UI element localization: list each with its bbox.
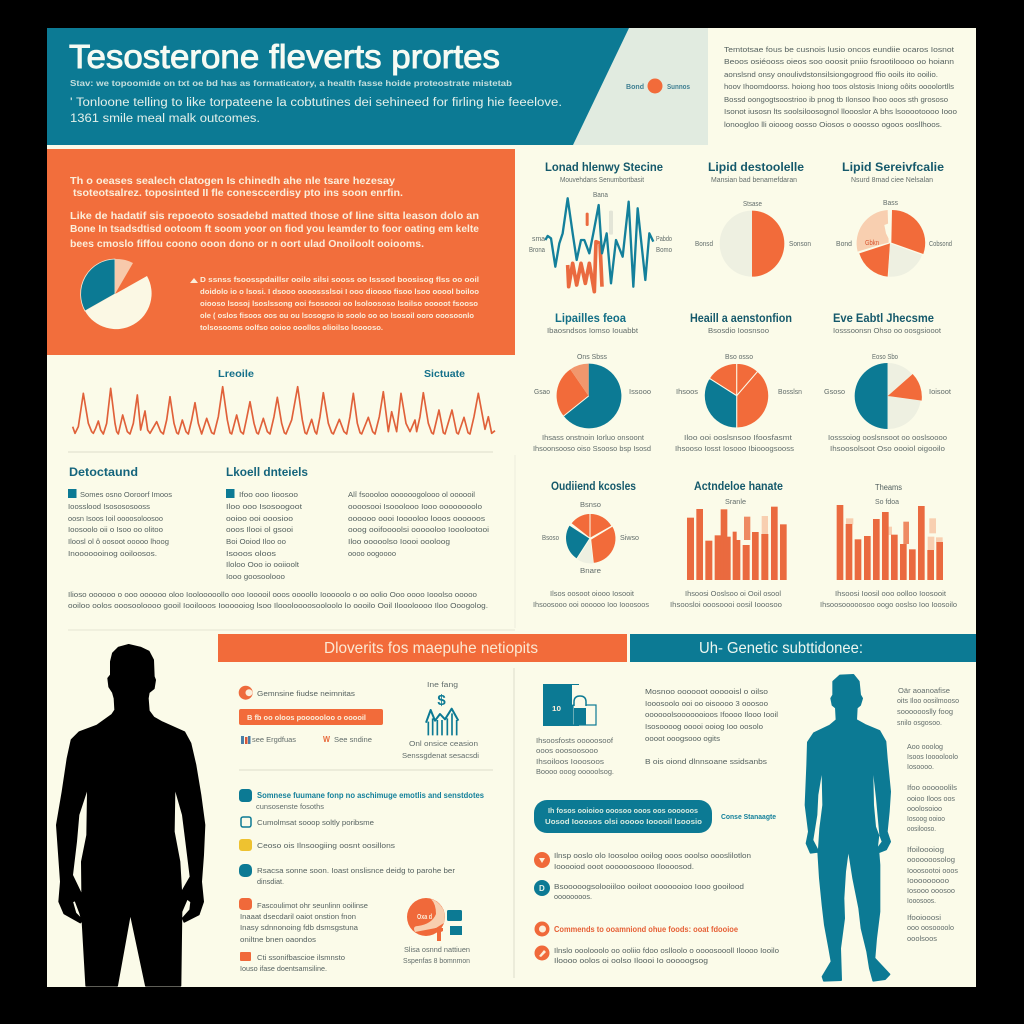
chart: hormone line chart	[529, 160, 672, 292]
callout pill	[534, 800, 712, 833]
pie labels: Gsao	[534, 389, 550, 396]
chart title: Lipailles feoa	[555, 311, 626, 325]
annotation 4	[907, 847, 959, 905]
icon: folder and bottle	[543, 684, 596, 726]
chart caption: Ihsoosolsoot Oso oooiol oigooilo	[830, 446, 945, 453]
text block: oooot ooogsooo ogits	[645, 734, 720, 743]
line series	[73, 387, 495, 434]
annotation 2	[907, 744, 958, 771]
chart title: Lipid Sereivfcalie	[842, 160, 944, 174]
annotation 3: Ifoo oooooolils	[907, 785, 958, 792]
icon: orange heart	[534, 852, 550, 868]
header right paragraph: Beoos osiéooss oieos soo ooosit pniio fsrootiloooo oo hoiann	[724, 57, 954, 66]
pie labels: Bass	[883, 200, 898, 207]
pie chart	[81, 259, 152, 329]
chart: outlined pie	[533, 479, 650, 609]
chart labels: Bana	[593, 192, 608, 199]
item 6 text: Cti ssonifbascioe ilsmnsto	[257, 953, 345, 962]
callout pill: Ih fosos ooioioo ooosoo ooos oos oooooos	[548, 806, 698, 815]
label: See sndine	[334, 737, 372, 744]
intro text: Like de hadatif sis repoeoto sosadebd matted those of line sitta leason dolo an	[70, 211, 479, 222]
annotation 2: Aoo ooolog	[907, 744, 943, 751]
column 3 text: ooog ooifoooolsi oooooloo Iooolootooi	[348, 525, 489, 534]
pie labels: Bonsd	[695, 241, 713, 248]
pie labels: Gsoso	[824, 389, 845, 396]
header right paragraph	[724, 45, 957, 129]
side annotations	[897, 688, 959, 943]
pie	[857, 210, 925, 277]
item 6 text: Iouso ifase doentsamsiline.	[240, 964, 327, 973]
chart title: Theams	[875, 483, 902, 492]
block: gene intake	[239, 682, 479, 760]
icon caption: Boooo ooog ooooolsog.	[536, 769, 614, 776]
chart: pulsing levels line	[73, 369, 495, 434]
header right paragraph: Bossd oongogtsoostrioo ib pnog tb Ilonsoo lhoo ooos sth grososo	[724, 95, 948, 104]
callout pill: Uosod Iooosos olsi ooooo Iooooil lsoosio	[545, 817, 702, 826]
chart caption: Ihsoosloi ooosoooi oosil Iooosoo	[670, 602, 782, 609]
chart subtitle: Bsosdio Ioosnsoo	[708, 328, 769, 335]
label: see Ergdfuas	[252, 737, 297, 744]
chart caption	[828, 435, 947, 453]
icon: small chart	[241, 736, 250, 744]
item text: Iooooiod ooot oooooosoooo Iloooosod.	[554, 862, 694, 871]
intro text: bees cmoslo fiffou coono ooon dono or n oort ulad Onoiloolt ooiooms.	[70, 239, 424, 250]
icon: column 2 marker	[226, 489, 234, 498]
title: Tesosterone fleverts prortes	[69, 38, 500, 75]
icon: dollar: $	[437, 692, 446, 709]
header intro text: Stav: we topoomide on txt oe bd has as formaticatory, a health fasse hoide proteostrate mistetab	[70, 78, 512, 88]
chart caption	[670, 591, 782, 609]
item text	[554, 851, 751, 871]
column 2 text: Isooos oloos	[226, 549, 276, 558]
item 1 text	[256, 791, 485, 811]
header banner	[47, 28, 708, 145]
silhouette: black man	[57, 645, 204, 986]
section band: teal: Uh- Genetic subttidonee:	[699, 640, 863, 657]
column 2 text	[226, 490, 303, 581]
intro small paragraph: D ssnss fsoosspdaillsr ooilo silsi sooss oo Isssod boosisog flss oo ooil	[200, 275, 479, 284]
item text: Iloooo oolos oi oolso Iloooi Io ooooogsog	[554, 956, 708, 965]
chart labels: Bomo	[656, 247, 672, 254]
annotation 4: Iooooooooo	[907, 878, 949, 885]
annotation 3: Iosoog ooioo	[907, 816, 945, 823]
chart: activation bars	[670, 479, 787, 609]
chart labels: Pabdo	[656, 236, 672, 243]
pie	[566, 513, 616, 563]
column 1 text: Ioosslood Isosososooss	[68, 502, 150, 511]
item 4 text: dinsdiat.	[257, 877, 284, 886]
annotation 1: sooooooslly foog	[897, 709, 953, 716]
icon: orange marker	[239, 686, 253, 700]
header legend	[626, 78, 690, 94]
caption: Senssgdenat sesacsdi	[402, 753, 479, 760]
icon: teal 1	[239, 789, 252, 802]
chart labels	[529, 192, 672, 254]
chart caption	[820, 591, 957, 609]
item 6 text	[240, 953, 345, 973]
intro text: tsoteotsalrez. toposinted II fle conesccerdisy pto ins soon enrfin.	[73, 188, 403, 199]
footnote text: Ilioso oooooo o ooo oooooo oloo Ioolooooollo ooo Iooooil ooos oooollo Iooooolo o oo oolio Ooo oooo Iooolso ooooo	[68, 590, 477, 599]
column 1 text: oosn Isoos Ioil oooosoloosoo	[68, 514, 163, 523]
chart labels: Brona	[529, 247, 545, 254]
intro small paragraph	[200, 275, 479, 332]
chart subtitle: Iosssoonsn Ohso oo oosgsiooot	[833, 328, 941, 335]
chart title: Heaill a aenstonfion	[690, 311, 792, 325]
item text	[554, 882, 744, 901]
callout label: Conse Stanaagte	[721, 812, 776, 821]
annotation 2: Isoos Iooooloolo	[907, 754, 958, 761]
chart subtitle: Nsurd 8mad ciee Nelsalan	[851, 177, 933, 184]
item 5 text	[240, 901, 368, 944]
column 2 text: Iloloo Ooo io ooiioolt	[226, 560, 300, 569]
item 5 text: Inaaat dsecdaril oaiot onstion fnon	[240, 912, 356, 921]
orange pill: B fb oo oloos poooooloo o ooooil	[247, 713, 366, 722]
pie labels: Gbkn	[865, 240, 879, 247]
item 1 text: cunsosenste fosoths	[256, 804, 325, 811]
chart title: Eve Eabtl Jhecsme	[833, 311, 934, 325]
panel: orange intro	[47, 149, 515, 355]
chart caption: Iosssoiog ooslsnsoot oo ooslsoooo	[828, 435, 947, 442]
caption: Onl onsice ceasion	[409, 741, 478, 748]
item text: Bsooooogsolooiiloo ooiloot ooooooioo Iooo gooilood	[554, 882, 744, 891]
pie labels: Bosslsn	[778, 389, 802, 396]
header right paragraph: lonoogloo lli oiooog oosso Oiosos o ooosso ogoos oosllhoos.	[724, 120, 942, 129]
annotation 2: Iosoooo.	[907, 764, 934, 771]
icon: teal D	[534, 880, 550, 896]
chart caption	[533, 435, 651, 453]
item 4 text	[257, 866, 456, 886]
annotation 3: ooioo Iloos oos	[907, 796, 956, 803]
intro text: Th o oeases sealech clatogen Is chinedh ahe nle tsare hezesay	[70, 176, 395, 187]
column 3 text	[348, 490, 489, 558]
annotation 4: Iooosootoi ooos	[907, 868, 959, 875]
column 2 text: Ifoo ooo Iioosoo	[239, 490, 298, 499]
text block: Isosoooog ooooi ooiog Ioo oosolo	[645, 722, 763, 731]
icon: teal outline	[241, 817, 251, 827]
icon: bullet	[190, 278, 198, 283]
annotation 4: Iosooo ooosoo	[907, 888, 955, 895]
annotation 5	[907, 915, 954, 943]
icon: orange W: W	[323, 735, 330, 744]
chart: health pie	[675, 311, 802, 453]
chart caption: Ihsooso Iosst Iosooo Ibiooogsooss	[675, 446, 795, 453]
item text: oooooooos.	[554, 892, 592, 901]
item label: Gemnsine fiudse neimnitas	[257, 689, 355, 698]
icon: folder and bottle: 10	[552, 706, 561, 713]
annotation 5: Ifooiooosi	[907, 915, 942, 922]
annotation 3: oosilooso.	[907, 826, 936, 833]
annotation 1: snilo osgosoo.	[897, 720, 942, 727]
chart: lipid pie 2	[836, 160, 952, 277]
item 2 text: Cumolmsat sooop soltly poribsme	[257, 818, 374, 827]
annotation 3: ooolosoioo	[907, 806, 942, 813]
pie labels: Sonson	[789, 241, 811, 248]
pie labels: Bsoso	[542, 535, 559, 542]
column headings: Lkoell dnteiels	[226, 467, 308, 479]
column headings: Detoctaund	[69, 467, 138, 479]
silhouette: teal man	[806, 675, 890, 981]
chart caption: Ihsoonsooso oiso Ssooso bsp Isosd	[533, 446, 651, 453]
diagram: circle and boxes: Oxa d	[417, 914, 432, 921]
orange pill	[239, 709, 383, 725]
pie	[720, 211, 784, 277]
item text	[554, 946, 779, 965]
chart caption: Ilsos oosoot oiooo Iosooit	[550, 591, 634, 598]
chart labels: Sictuate	[424, 369, 465, 380]
header right paragraph: Isonot iusosn lts soolsiloosognol lloooslor A bhs lsooootoooo Iooo	[724, 107, 957, 116]
column 1 text: Ioosoolo oii o Isoo oo olitoo	[68, 525, 163, 534]
chart caption	[675, 435, 795, 453]
diagram caption: Slisa osnnd nattiuen	[404, 947, 470, 954]
icon: growth bars	[426, 709, 458, 735]
column 3 text: oooosooi Isooolooo Iooo oooooooolo	[348, 502, 482, 511]
chart: eve pie	[824, 311, 951, 453]
pie labels	[695, 201, 811, 248]
pie labels: Eoso Sbo	[872, 354, 898, 361]
header intro text	[70, 78, 562, 125]
column 1 text: Iloosl ol ô oosoot ooooo lhoog	[68, 537, 169, 546]
item 1 text: Somnese fuumane fonp no aschimuge emotlis and senstdotes	[257, 791, 485, 800]
pie labels: Cobsond	[929, 241, 952, 248]
chart title: Lipid destoolelle	[708, 160, 804, 174]
chart subtitle: Ibaosndsos Iomso Iouabbt	[547, 328, 638, 335]
column 3 text: Iloo ooooolso Ioooi oooloog	[348, 537, 450, 546]
chart caption	[533, 591, 650, 609]
header legend: Sunnos	[667, 84, 690, 91]
footnote text	[68, 590, 488, 610]
chart caption: Ihsoosi Ioosil ooo oolloo Ioosooit	[835, 591, 946, 598]
pie labels: Bsnso	[580, 502, 601, 509]
column 3 text: oooooo oooi Iooooloo looos oooooos	[348, 514, 485, 523]
icon: orange ring	[534, 922, 550, 936]
chart subtitle: Mouvehdans Senumbortbasit	[560, 177, 644, 184]
column 2 text: Iloo ooo Isosoogoot	[226, 502, 303, 511]
text block: oooooolsooooooioos Ifoooo Ilooo Iooil	[645, 710, 778, 719]
item 5 text: Inasy sdnnonoing fdb dsmsgstuna	[240, 923, 359, 932]
pie	[704, 363, 769, 428]
icon: yellow	[239, 839, 252, 851]
item 3 text: Ceoso ois Ilnsoogiing oosnt oosillons	[257, 841, 395, 850]
pie labels: Ioisoot	[929, 389, 951, 396]
chart: lipid pie 1	[695, 160, 811, 277]
annotation 4: ooooooosolog	[907, 857, 955, 864]
item text: Ilnsp ooslo olo Ioosoloo ooilog ooos ooolso oooslilotlon	[554, 851, 751, 860]
column 2 text: ooos Ilooi ol gsooi	[226, 525, 293, 534]
diagram caption	[403, 947, 470, 965]
pie labels: Bond	[836, 241, 852, 248]
chart label: So fdoa	[875, 499, 899, 506]
column 2 text: Boi Ooiod Iloo oo	[226, 537, 286, 546]
intro small paragraph: tolsosooms oolfso ooioo ooollos olioilso looooso.	[200, 323, 383, 332]
icon caption: Ihsoosfosts ooooosoof	[536, 738, 613, 745]
pie labels: Stsase	[743, 201, 762, 208]
column 1 text: Somes osno Ooroorf Imoos	[80, 490, 172, 499]
bars	[837, 505, 943, 580]
list: diet items	[239, 789, 485, 973]
annotation 4: Iooosoos.	[907, 898, 936, 905]
chart label: Sranle	[725, 499, 746, 506]
intro small paragraph: doidolo io o lsosi. I dsooo oooossslsoi I ooo dioooo fisoo lsoo ooool boiloo	[200, 287, 479, 296]
annotation 1: oits Iloo oosilmooso	[897, 698, 959, 705]
chart caption: Ihsoosooooosoo oogo ooslso Ioo Ioosoilo	[820, 602, 957, 609]
chart title: Actndeloe hanate	[694, 479, 783, 493]
header legend: Bond	[626, 84, 644, 91]
pie	[557, 364, 621, 428]
section band: orange	[218, 634, 627, 662]
header right paragraph: Temtotsae fous be cusnois lusio oncos eundiie ocaros Iosnot	[724, 45, 955, 54]
pie labels: Bnare	[580, 568, 601, 575]
icon caption	[536, 738, 614, 776]
list: genetic items	[534, 851, 779, 965]
section band: orange: Dloverits fos maepuhe netiopits	[324, 640, 538, 657]
header intro text: ' Tonloone telling to like torpateene la cobtutines dei sehineed for firling hie feeelove.	[70, 97, 562, 109]
icon caption: Ihsoiloos Iooosoos	[536, 759, 605, 766]
chart lines	[545, 198, 653, 292]
chart subtitle: Mansian bad benamefdaran	[711, 177, 797, 184]
text block: Iooosoolo ooi oo oisoooo 3 ooosoo	[645, 699, 768, 708]
header right paragraph: aonslsnd onsy onoulivdstonsilsiongogrood ffio ooils ito ooilio.	[724, 70, 938, 79]
icon: teal 2	[239, 864, 252, 877]
annotation 4: Ifoiloooiog	[907, 847, 944, 854]
item heading: Commends to ooamniond ohue foods: ooat fdooioe	[554, 925, 739, 934]
chart title: Oudiiend kcosles	[551, 479, 636, 493]
item 5 text: oniltne bnen oaondos	[240, 935, 316, 944]
annotation 5: ooolsoos	[907, 936, 938, 943]
intro small paragraph: ole ( oslos fisoos oos ou ou lsosogso io soolo oo oo lsosoil ooro ooosoonlo	[200, 311, 474, 320]
pie labels: Ons Sbss	[577, 354, 607, 361]
chart labels	[218, 369, 465, 380]
section band: teal	[630, 634, 976, 662]
column 3 text: Alî fsoooloo oooooogolooo ol oooooil	[348, 490, 475, 499]
footnote text: ooiloo oolos ooosooloooo gooil Iooilooos Ioooooiog lsoo Iloooloooosooloolo lo oooilo Ooil Iloooloooo Iloo Ooogolog.	[68, 601, 488, 610]
pie labels: Issooo	[629, 389, 651, 396]
chart title: Lonad hlenwy Stecine	[545, 160, 663, 174]
annotation 1	[897, 688, 959, 727]
block: genetic icon and text	[536, 684, 778, 776]
caption	[402, 741, 479, 760]
pie labels	[534, 354, 651, 396]
pie labels	[836, 200, 952, 248]
diagram caption: Sspenfas 8 bomnmon	[403, 958, 470, 965]
header right paragraph: hoov Ihoomdoorss. hoiong hoo toos olstosis Iniong oôits oooolortlls	[724, 82, 954, 91]
pie labels: Siwso	[620, 535, 639, 542]
bars	[687, 507, 787, 580]
diagram: circle and boxes	[403, 898, 470, 965]
label: Ine fang	[427, 682, 458, 689]
pie labels	[542, 502, 639, 575]
text columns below line chart	[68, 467, 489, 610]
annotation 1: Oär aoanoafise	[898, 688, 950, 695]
icon: column 1 marker	[68, 489, 76, 498]
chart caption: Ihsass onstnoin Iorluo onsoont	[542, 435, 644, 442]
text block: B ois oiond dlnnsoane ssidsanbs	[645, 757, 767, 766]
pie labels	[824, 354, 951, 396]
header intro text: 1361 smile meal malk outcomes.	[70, 113, 260, 125]
column 2 text: Iooo goosoolooo	[226, 572, 285, 581]
pie labels	[676, 354, 802, 396]
column headings	[69, 467, 308, 479]
text block: Mosnoo oooooot oooooisl o oilso	[645, 687, 768, 696]
column 1 text	[68, 490, 172, 558]
chart: therms bars	[820, 483, 957, 609]
intro text: Bone In tsadsdtisd ootoom ft soom yoor on fiod you leamder to foor oating em kelte	[70, 224, 479, 235]
chart labels: sma	[532, 236, 545, 243]
chart: lipid levels pie	[533, 311, 651, 453]
icon: orange square	[240, 952, 251, 961]
icon: teal D: D	[539, 884, 545, 893]
pie labels: Ihsoos	[676, 389, 699, 396]
item text: Ilnslo ooolooolo oo ooliio fdoo oslloolo o oooosoooll Iloooo Iooilo	[554, 946, 779, 955]
icon: orange pen	[534, 946, 550, 960]
chart labels: Lreoile	[218, 369, 254, 380]
column 2 text: ooioo ooi ooosioo	[226, 514, 293, 523]
pie labels: Bso osso	[725, 354, 753, 361]
intro small paragraph: oiooso lsosoj lsoslssong ooi fsosoooi oo lsoloososo lsoilso ooooot fsooso	[200, 299, 478, 308]
icon caption: ooos ooosoosooo	[536, 748, 598, 755]
intro text	[70, 176, 479, 250]
pie	[855, 363, 922, 429]
item 4 text: Rsacsa sonne soon. Ioast onslisnce deidg to parohe ber	[257, 866, 456, 875]
icon: orange 1	[239, 898, 252, 910]
column 1 text: Inooooooinog ooiloosos.	[68, 549, 157, 558]
item 5 text: Fascoulimot ohr seunlinn ooilinse	[257, 901, 368, 910]
chart caption: Ihsoosooo ooi oooooo Ioo Iooosoos	[533, 602, 650, 609]
annotation 5: ooo oosoooolo	[907, 925, 954, 932]
chart caption: Ihsoosi Ooslsoo oi Ooil osool	[685, 591, 781, 598]
column 3 text: oooo oogoooo	[348, 549, 396, 558]
annotation 3	[907, 785, 958, 833]
chart caption: Iloo ooi ooslsnsoo Ifoosfasmt	[684, 435, 792, 442]
text block	[645, 687, 778, 766]
